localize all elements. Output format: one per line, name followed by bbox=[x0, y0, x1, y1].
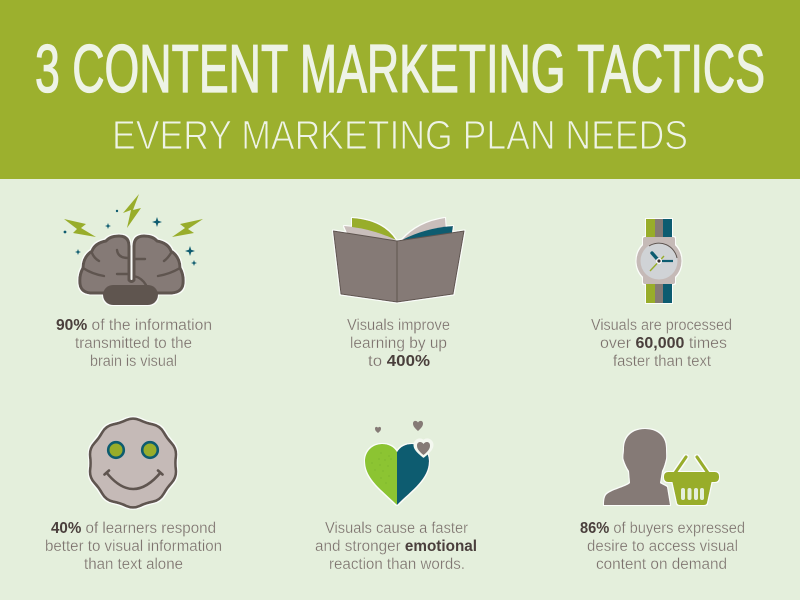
text: emotional caption: and stronger emotional bbox=[315, 538, 477, 555]
text: emotional caption bbox=[315, 520, 477, 573]
text: buyers caption: content on demand bbox=[596, 556, 727, 573]
text: 90 percent caption: 90% of the information bbox=[56, 317, 212, 334]
text: learners caption: than text alone bbox=[84, 556, 183, 573]
icon: smiley face bbox=[90, 419, 176, 507]
text: learning caption: to 400% bbox=[368, 353, 430, 370]
panel: watch statistic bbox=[591, 219, 732, 370]
text: learning caption: Visuals improve bbox=[347, 317, 450, 334]
panel: smiley statistic bbox=[45, 419, 222, 573]
icon: open book bbox=[334, 218, 464, 302]
icon: split heart with small hearts bbox=[365, 421, 432, 505]
text: speed caption: Visuals are processed bbox=[591, 317, 732, 334]
text: emotional caption: Visuals cause a faster bbox=[325, 520, 468, 537]
icon: brain with lightning and sparkles bbox=[64, 194, 203, 305]
icon: person with shopping basket bbox=[604, 429, 719, 505]
text: 90 percent caption bbox=[56, 317, 212, 370]
panel: book statistic bbox=[334, 218, 464, 370]
text: buyers caption: desire to access visual bbox=[587, 538, 738, 555]
text: emotional caption: reaction than words. bbox=[329, 556, 465, 573]
text: learning caption bbox=[347, 317, 450, 370]
text: learners caption bbox=[45, 520, 222, 573]
subtitle: EVERY MARKETING PLAN NEEDS bbox=[112, 112, 688, 158]
text: buyers caption bbox=[580, 520, 745, 573]
text: speed caption bbox=[591, 317, 732, 370]
text: learners caption: better to visual information bbox=[45, 538, 222, 555]
panel: brain statistic bbox=[56, 194, 212, 370]
text: learning caption: learning by up bbox=[350, 335, 447, 352]
text: speed caption: faster than text bbox=[613, 353, 712, 370]
text: speed caption: over 60,000 times bbox=[600, 335, 727, 352]
text: 90 percent caption: transmitted to the bbox=[75, 335, 192, 352]
text: 90 percent caption: brain is visual bbox=[90, 353, 177, 370]
header band bbox=[0, 0, 800, 179]
panel: heart statistic bbox=[315, 421, 477, 573]
icon: wristwatch bbox=[636, 219, 682, 303]
panel: buyer statistic bbox=[580, 429, 745, 573]
text: learners caption: 40% of learners respond bbox=[51, 520, 216, 537]
text: buyers caption: 86% of buyers expressed bbox=[580, 520, 745, 537]
